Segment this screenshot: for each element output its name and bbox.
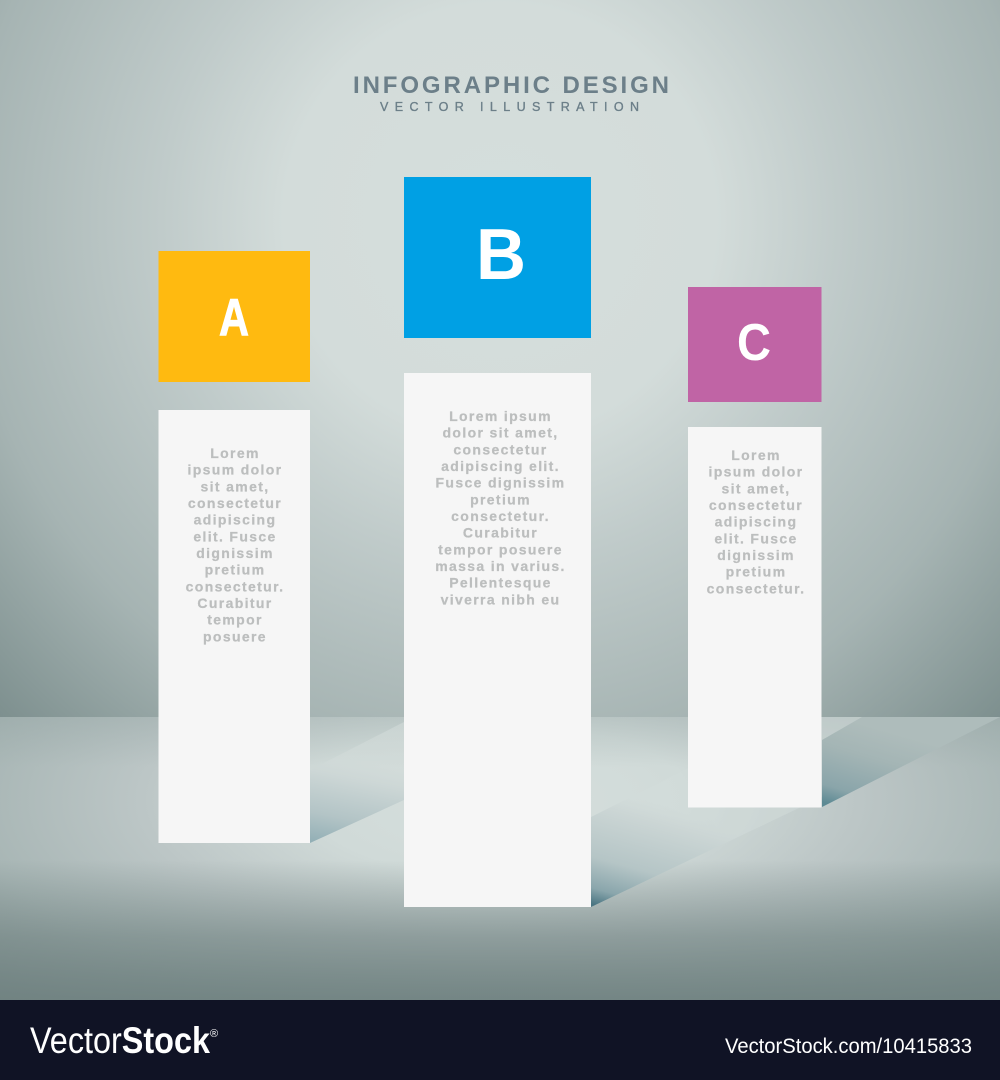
body text C: consectetur	[709, 497, 803, 513]
text card A	[158, 410, 310, 843]
body text C: consectetur.	[707, 580, 805, 596]
body text C: dignissim	[717, 547, 795, 563]
letter A: A	[219, 289, 249, 347]
header block B	[404, 177, 591, 338]
panel: column A	[158, 251, 310, 843]
shadow of column A	[310, 722, 404, 843]
body text A: pretium	[205, 562, 265, 578]
body text C: ipsum dolor	[709, 464, 803, 480]
floor top shading	[0, 717, 1000, 767]
body text A: ipsum dolor	[188, 462, 282, 478]
heading: INFOGRAPHIC DESIGN	[353, 72, 669, 99]
background wall	[0, 0, 1000, 717]
floor bottom shading	[0, 860, 1000, 1000]
shadow of column C	[822, 717, 1000, 807]
body text A: sit amet,	[201, 478, 269, 494]
body text A: tempor	[207, 612, 263, 628]
body text B: Lorem ipsum	[449, 408, 552, 424]
footer logo: VectorStock	[30, 1020, 210, 1061]
body text B: dolor sit amet,	[443, 425, 558, 441]
panel: column B	[404, 177, 591, 907]
registered mark: ®	[210, 1028, 218, 1040]
body text B: pretium	[470, 491, 531, 507]
title	[353, 72, 669, 114]
body text B: viverra nibh eu	[441, 591, 560, 607]
body text B: adipiscing elit.	[441, 458, 560, 474]
body text A: Lorem	[210, 445, 260, 461]
body text B: Fusce dignissim	[436, 475, 565, 491]
body text A: dignissim	[196, 545, 274, 561]
body text A: posuere	[203, 628, 267, 644]
header block C	[688, 287, 822, 402]
letter B: B	[476, 215, 526, 295]
body text B: consectetur.	[451, 508, 550, 524]
body text B: tempor posuere	[438, 541, 563, 557]
body text A: adipiscing	[194, 512, 276, 528]
letter C: C	[737, 314, 771, 372]
body text C: elit. Fusce	[714, 530, 798, 546]
body text A: consectetur	[188, 495, 282, 511]
body text A: Curabitur	[197, 595, 273, 611]
footer image id: VectorStock.com/10415833	[725, 1034, 972, 1058]
body text C: Lorem	[731, 447, 781, 463]
body text A	[186, 445, 284, 644]
body text C	[707, 447, 805, 596]
body text B	[435, 408, 566, 607]
subheading: VECTOR ILLUSTRATION	[380, 100, 639, 114]
body text A: consectetur.	[186, 578, 284, 594]
header block A	[158, 251, 310, 382]
panel: column C	[688, 287, 822, 808]
body text B: Curabitur	[463, 525, 538, 541]
text card C	[688, 427, 822, 808]
footer bar	[0, 1000, 1000, 1080]
body text C: adipiscing	[715, 514, 797, 530]
background floor	[0, 717, 1000, 1000]
body text C: pretium	[726, 564, 786, 580]
body text B: consectetur	[453, 441, 548, 457]
body text C: sit amet,	[722, 480, 790, 496]
body text A: elit. Fusce	[193, 528, 277, 544]
body text B: massa in varius.	[435, 558, 566, 574]
text card B	[404, 373, 591, 907]
shadow of column B	[591, 717, 990, 907]
body text B: Pellentesque	[449, 575, 552, 591]
